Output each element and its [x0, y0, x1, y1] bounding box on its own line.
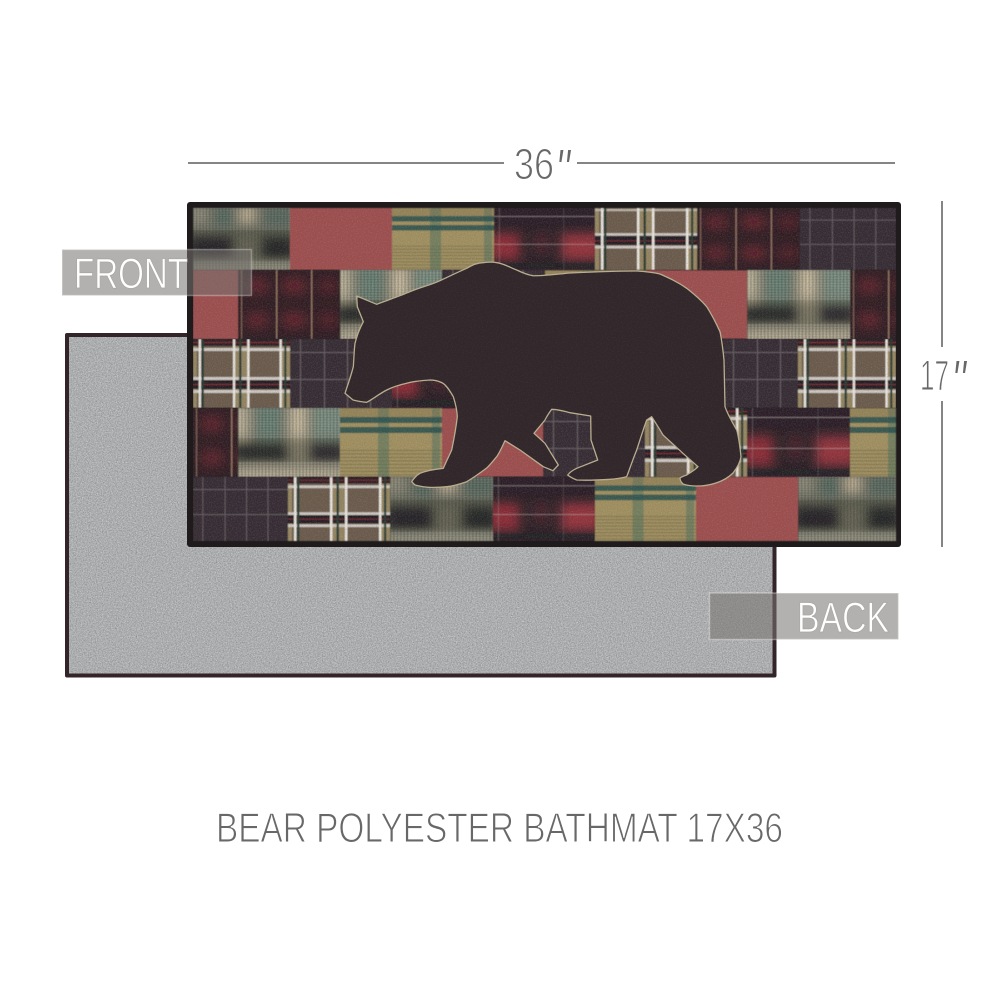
- icon: bear silhouette: [345, 262, 742, 488]
- label: BACK: BACK: [797, 594, 889, 642]
- dimension: width 36 inches: 36: [514, 140, 554, 189]
- dimension: width 36 inches: [188, 137, 895, 204]
- patchwork: row 4: [193, 404, 952, 482]
- patchwork: row 1: [189, 204, 896, 273]
- patchwork: row 2: [193, 266, 952, 344]
- label: BACK: [710, 593, 898, 642]
- dimension: height 17 inches: [920, 201, 968, 547]
- dimension: height 17 inches: ": [951, 348, 968, 415]
- title: product name: BEAR POLYESTER BATHMAT 17X36: [216, 804, 783, 851]
- dimension: height 17 inches: 17: [920, 352, 949, 400]
- label: FRONT: FRONT: [74, 250, 188, 298]
- patchwork: row 5: [193, 473, 900, 544]
- panel: front of bathmat: [187, 202, 952, 547]
- panel: back of bathmat: [65, 333, 776, 678]
- dimension: width 36 inches: ": [555, 137, 572, 204]
- patchwork: row 3: [193, 339, 896, 408]
- mat border: [187, 202, 901, 547]
